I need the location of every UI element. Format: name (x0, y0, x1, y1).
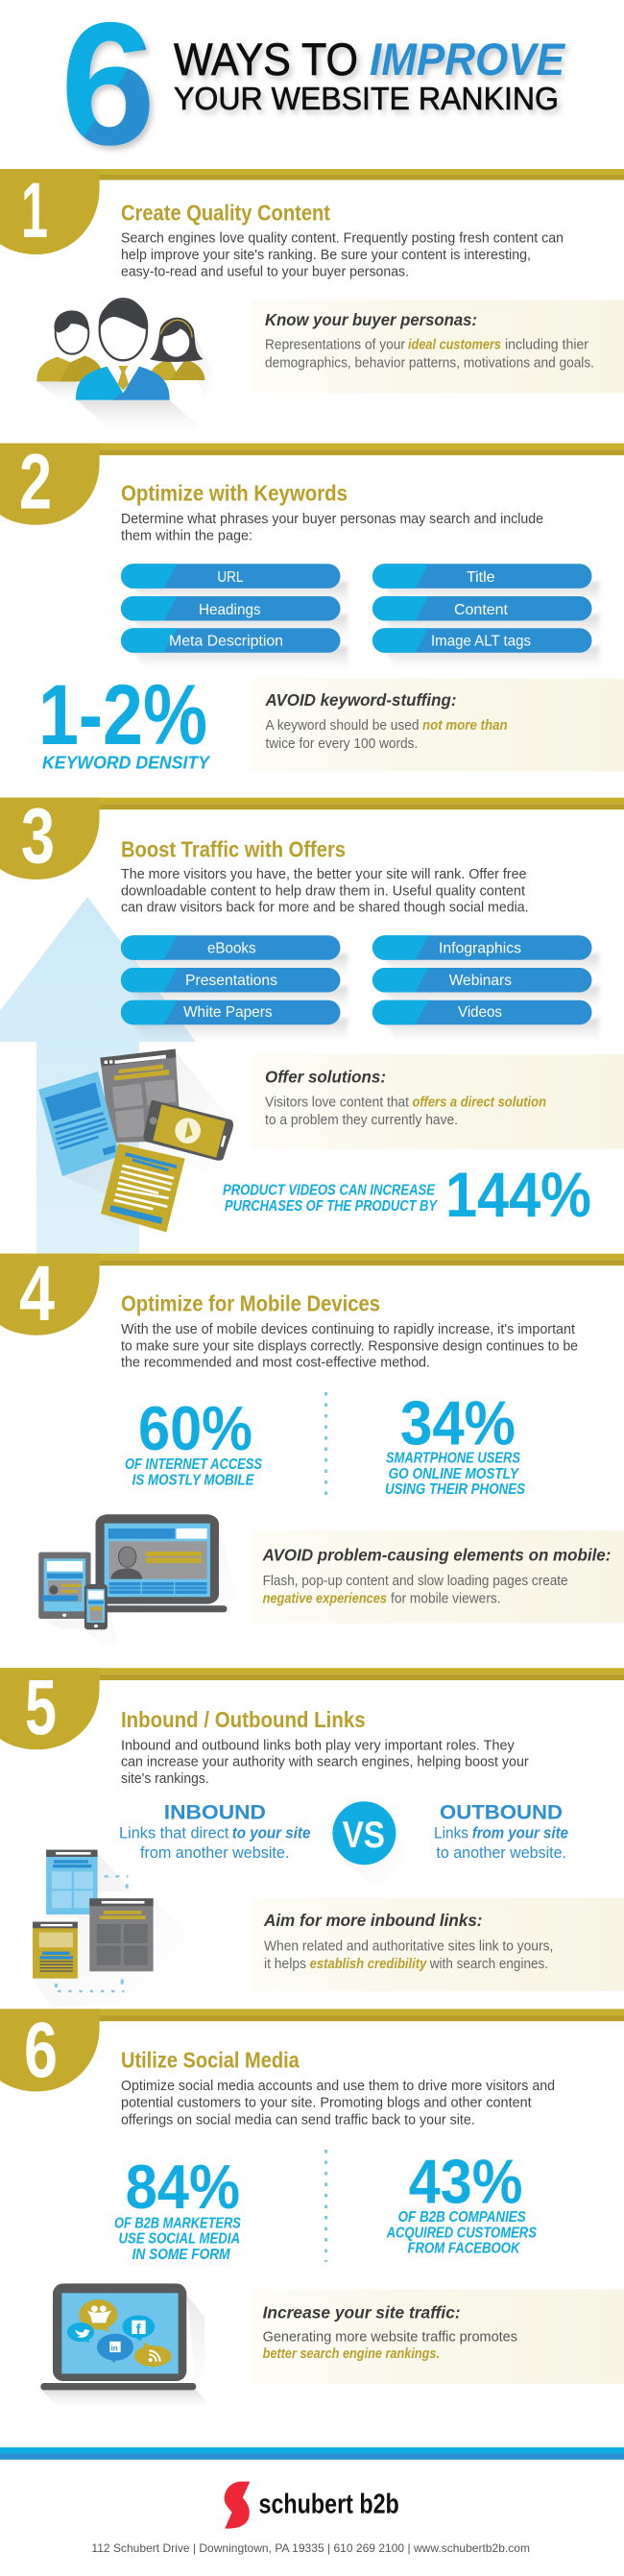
section 3 body: The more visitors you have, the better your site will rank. Offer free (121, 866, 526, 882)
panel text (264, 1938, 553, 1972)
section 2 body: them within the page: (121, 527, 252, 543)
inbound definition: from another website. (140, 1844, 289, 1862)
pill: Infographics (372, 935, 599, 975)
VS badge (332, 1801, 413, 1882)
panel heading: Offer solutions: (265, 1067, 386, 1086)
section 4 (0, 1250, 624, 1649)
section 6 heading: Utilize Social Media (121, 2048, 300, 2073)
pill: Content (372, 596, 599, 637)
section 3 body: can draw visitors back for more and be shared though social media. (121, 900, 529, 916)
panel text: with search engines. (429, 1956, 548, 1972)
pill: Title: Title (467, 569, 495, 586)
section 1 header bar and badge (0, 167, 624, 254)
panel text: establish credibility (310, 1956, 427, 1972)
logo: schubert b2b: schubert b2b (259, 2490, 399, 2520)
VS badge: VS (343, 1815, 385, 1856)
pill: Content: Content (454, 602, 509, 618)
inbound definition: Links that direct (119, 1825, 229, 1842)
section 5 body: can increase your authority with search engines, helping boost your (121, 1754, 529, 1770)
panel text: better search engine rankings. (263, 2346, 440, 2362)
title (60, 0, 566, 181)
icon: laptop with social media bubbles: in (111, 2344, 118, 2352)
section 1 heading: Create Quality Content (121, 200, 330, 225)
panel text: not more than (422, 717, 508, 734)
section 5 body: site's rankings. (121, 1770, 209, 1787)
stat: 84%: 84% (126, 2152, 240, 2222)
section 4 body: With the use of mobile devices continuing to rapidly increase, it's important (121, 1321, 576, 1337)
panel text (265, 336, 594, 371)
section 6 body: Optimize social media accounts and use them to drive more visitors and (121, 2078, 555, 2094)
pill: Meta Description: Meta Description (169, 634, 283, 650)
pill: Headings: Headings (199, 602, 261, 618)
stat: 1-2% keyword density: KEYWORD DENSITY (42, 753, 211, 773)
title line 1: WAYS TO (174, 34, 358, 84)
stat: 43% (386, 2147, 537, 2257)
panel text: it helps (264, 1956, 306, 1972)
inbound definition: INBOUND (164, 1801, 266, 1823)
outbound definition: OUTBOUND (440, 1801, 563, 1823)
pills: offer types (121, 935, 599, 1041)
inbound definition (119, 1801, 310, 1862)
pill: eBooks: eBooks (207, 941, 256, 956)
panel: aim for more inbound links (252, 1898, 624, 1991)
footer (0, 2447, 624, 2555)
section 6 header bar and badge: 6 (24, 2007, 58, 2094)
pill: Presentations: Presentations (185, 973, 277, 989)
panel: offer solutions (252, 1054, 624, 1149)
panel text: A keyword should be used (265, 717, 419, 734)
section 2 header bar and badge: 2 (19, 438, 52, 525)
stat: 84%: IN SOME FORM (132, 2247, 231, 2263)
pill: Videos: Videos (458, 1004, 502, 1021)
section 5 heading: Inbound / Outbound Links (121, 1707, 366, 1732)
icon: linked web pages (33, 1850, 199, 2007)
panel text (265, 717, 508, 752)
stat: 34%: GO ONLINE MOSTLY (389, 1466, 519, 1482)
icon: laptop with social media bubbles: f (136, 2322, 142, 2338)
panel text: Generating more website traffic promotes (263, 2329, 517, 2345)
section 1 header bar and badge: 1 (21, 167, 48, 254)
stat: 60%: OF INTERNET ACCESS (125, 1457, 263, 1473)
section 6 (0, 2007, 624, 2407)
background arrow (0, 897, 196, 1254)
panel text: demographics, behavior patterns, motivations and goals. (265, 354, 594, 371)
stat: 144%: PURCHASES OF THE PRODUCT BY (225, 1198, 438, 1215)
stat: 43%: ACQUIRED CUSTOMERS (386, 2225, 537, 2241)
section 3 heading: Boost Traffic with Offers (121, 836, 346, 861)
panel: increase your site traffic (252, 2289, 624, 2384)
pill: Meta Description (121, 628, 348, 668)
panel text: for mobile viewers. (391, 1591, 501, 1607)
section 4 header bar and badge: 4 (19, 1250, 55, 1337)
section 4 header bar and badge (0, 1250, 624, 1337)
section 6 body: potential customers to your site. Promoting blogs and other content (121, 2095, 532, 2111)
pill: Image ALT tags (372, 628, 599, 668)
stat: 60%: 60% (138, 1393, 252, 1463)
stat: 43%: 43% (409, 2147, 522, 2216)
pill: Videos (372, 1000, 599, 1041)
section 4 body: the recommended and most cost-effective method. (121, 1355, 430, 1371)
outbound definition: to another website. (436, 1844, 566, 1862)
panel: avoid keyword stuffing (252, 679, 624, 771)
panel heading: AVOID keyword-stuffing: (265, 690, 457, 710)
section 6 header bar and badge (0, 2007, 624, 2094)
inbound definition: to your site (232, 1825, 310, 1842)
section 6 body (121, 2078, 555, 2129)
icon: buyer personas (36, 299, 224, 429)
icon: content offers (38, 1049, 233, 1232)
stat: 60%: IS MOSTLY MOBILE (132, 1472, 254, 1488)
section 2 header bar and badge (0, 438, 624, 525)
pill: Headings (121, 596, 348, 637)
stat: 144% (223, 1159, 591, 1230)
stat: 34%: USING THEIR PHONES (385, 1481, 526, 1498)
section 5 body (121, 1737, 529, 1787)
panel text: offers a direct solution (413, 1094, 546, 1110)
pill: Webinars: Webinars (449, 973, 512, 989)
panel text: ideal customers (408, 336, 501, 352)
panel: know your buyer personas (252, 300, 624, 393)
stat: 43%: OF B2B COMPANIES (398, 2209, 526, 2226)
panel text (263, 1573, 568, 1607)
stat: 1-2% keyword density: 1-2% (38, 666, 207, 762)
section 1 body: easy-to-read and useful to your buyer personas. (121, 263, 409, 279)
section 1 (0, 167, 624, 429)
outbound definition (434, 1801, 568, 1862)
stat: 144%: 144% (445, 1159, 591, 1230)
panel text (263, 2329, 517, 2362)
panel heading: Know your buyer personas: (265, 310, 477, 329)
section 5 header bar and badge: 5 (25, 1664, 57, 1751)
panel heading: Increase your site traffic: (263, 2302, 461, 2322)
panel text: negative experiences (263, 1591, 387, 1607)
section 1 body: help improve your site's ranking. Be sure your content is interesting, (121, 247, 531, 263)
pills: keyword locations (121, 564, 599, 668)
section 2 body (121, 511, 543, 543)
section 1 body (121, 230, 564, 279)
stat: 144%: PRODUCT VIDEOS CAN INCREASE (223, 1182, 436, 1198)
section 5 (0, 1664, 624, 2007)
panel text: to a problem they currently have. (265, 1112, 458, 1128)
pill: URL: URL (217, 569, 243, 586)
title line 1 (174, 34, 566, 84)
section 5 body: Inbound and outbound links both play very important roles. They (121, 1737, 515, 1753)
pill: eBooks (121, 935, 348, 975)
title line 2: YOUR WEBSITE RANKING (174, 81, 559, 116)
pill: Presentations (121, 968, 348, 1008)
pill: URL (121, 564, 348, 604)
logo: schubert b2b (225, 2482, 399, 2529)
section 2 body: Determine what phrases your buyer personas may search and include (121, 511, 543, 527)
stat: 43%: FROM FACEBOOK (407, 2241, 521, 2257)
stat: 34%: 34% (400, 1388, 516, 1457)
outbound definition: from your site (472, 1825, 568, 1842)
panel heading: Aim for more inbound links: (263, 1911, 482, 1930)
section 3 header bar and badge: 3 (21, 792, 55, 879)
section 2 heading: Optimize with Keywords (121, 481, 348, 506)
panel text (265, 1094, 546, 1128)
stat: 84% (114, 2152, 241, 2263)
section 3 header bar and badge (0, 792, 624, 879)
panel text: twice for every 100 words. (265, 735, 418, 752)
panel text: Flash, pop-up content and slow loading pages create (263, 1573, 568, 1589)
pill: Title (372, 564, 599, 604)
section 4 heading: Optimize for Mobile Devices (121, 1291, 380, 1316)
icon: mobile devices (38, 1514, 243, 1649)
stat: 34%: SMARTPHONE USERS (386, 1450, 521, 1466)
panel: avoid problem-causing elements (252, 1530, 624, 1624)
stat: 84%: USE SOCIAL MEDIA (119, 2231, 240, 2248)
contact line: 112 Schubert Drive | Downingtown, PA 19335 | 610 269 2100 | www.schubertb2b.com (91, 2541, 530, 2555)
outbound definition: Links (434, 1825, 468, 1842)
section 4 body: to make sure your site displays correctly. Responsive design continues to be (121, 1337, 578, 1354)
section 3 (0, 792, 624, 1254)
pill: Infographics: Infographics (439, 941, 521, 956)
pill: Webinars (372, 968, 599, 1008)
panel text: When related and authoritative sites link to yours, (264, 1938, 553, 1954)
title line 1: IMPROVE (370, 34, 566, 84)
pill: Image ALT tags: Image ALT tags (431, 634, 531, 650)
pill: White Papers (121, 1000, 348, 1041)
panel text: including thier (505, 336, 588, 352)
section 2 (0, 438, 624, 773)
panel heading: AVOID problem-causing elements on mobile: (262, 1546, 611, 1565)
section 5 header bar and badge (0, 1664, 624, 1751)
footer bar (0, 2447, 624, 2460)
icon: laptop with social media bubbles (40, 2283, 211, 2407)
stat: 34% (385, 1388, 526, 1498)
section 6 body: offerings on social media can send traffic back to your site. (121, 2112, 475, 2129)
panel text: Visitors love content that (265, 1094, 410, 1110)
pill: White Papers: White Papers (183, 1004, 273, 1021)
section 1 body: Search engines love quality content. Frequently posting fresh content can (121, 230, 564, 247)
section 3 body (121, 866, 529, 916)
section 4 body (121, 1321, 578, 1371)
section 3 body: downloadable content to help draw them in. Useful quality content (121, 882, 526, 899)
stat: 84%: OF B2B MARKETERS (114, 2215, 241, 2231)
stat: 60% (125, 1393, 263, 1488)
panel text: Representations of your (265, 336, 405, 352)
